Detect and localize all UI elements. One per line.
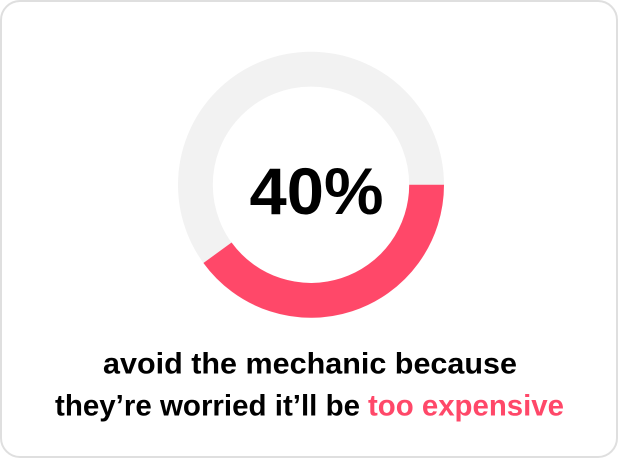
caption line 1: avoid the mechanic because [103, 348, 517, 380]
donut chart: 40% [195, 69, 427, 300]
caption line 2: they’re worried it’ll be [55, 390, 360, 422]
caption highlight: too expensive [368, 390, 564, 422]
big number: 40% [250, 154, 384, 228]
donut track [195, 69, 427, 300]
donut value arc [218, 185, 427, 300]
caption [55, 348, 564, 422]
